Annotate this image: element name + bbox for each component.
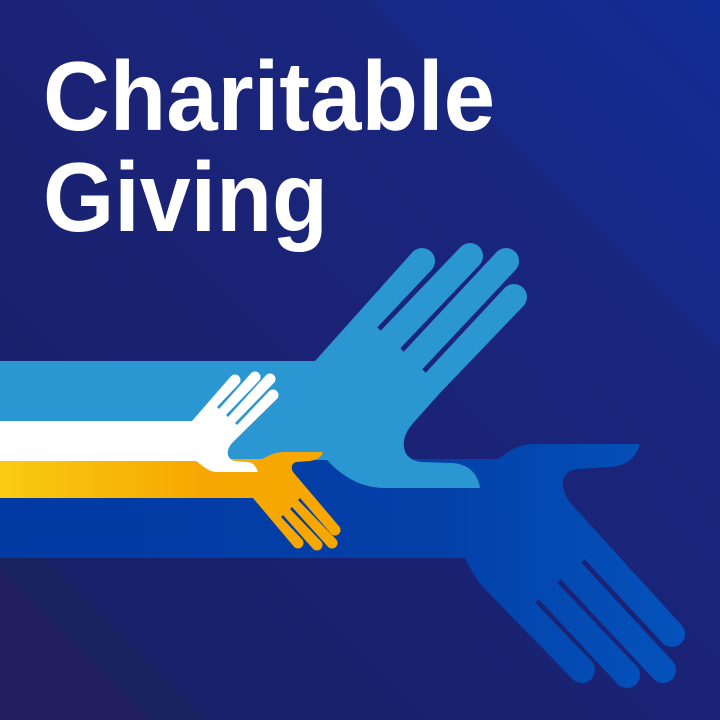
- title: [43, 41, 495, 252]
- title: Charitable: [43, 41, 495, 151]
- hand: dark blue, lower right: [0, 444, 685, 688]
- hand: yellow, lower centre: [0, 452, 341, 551]
- title: Giving: [43, 142, 328, 252]
- hand: light blue, upper right: [0, 243, 527, 488]
- hand: white, upper centre: [0, 371, 279, 472]
